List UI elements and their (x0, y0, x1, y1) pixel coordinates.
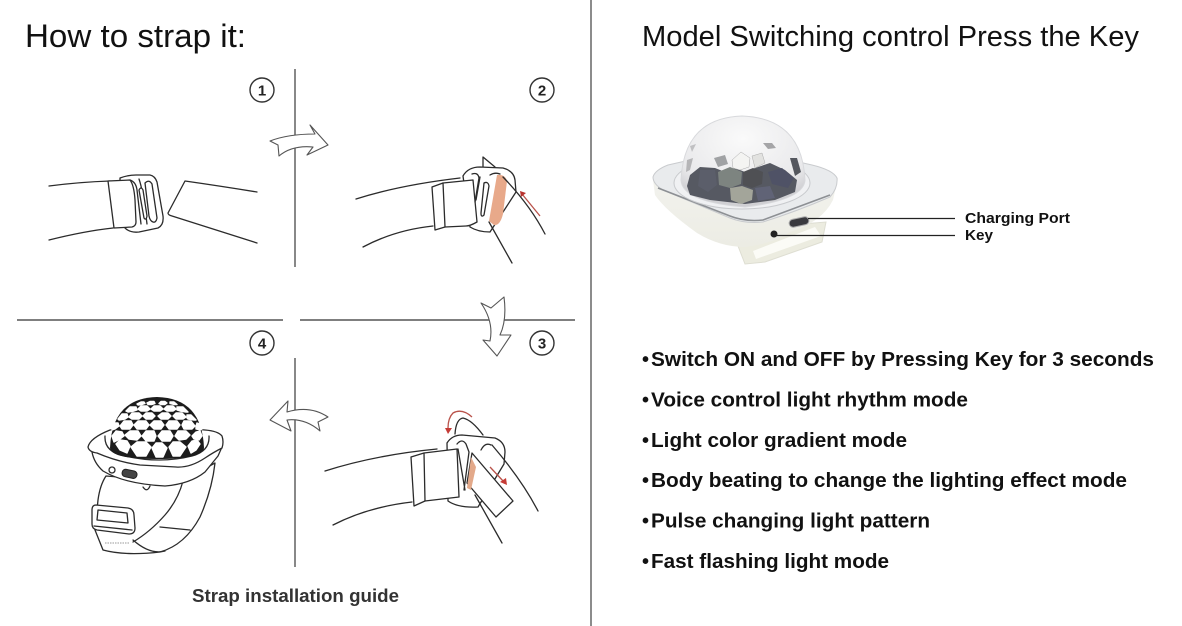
red arrows (445, 411, 507, 485)
arrow: step 3 to 4 (270, 401, 328, 431)
bullet 6: Fast flashing light mode (651, 551, 889, 573)
callout: key: Key (965, 228, 993, 244)
heading: model switching: Model Switching control Press the Key (642, 21, 1139, 53)
bullet 2: Voice control light rhythm mode (651, 390, 968, 412)
bullet 3: Light color gradient mode (651, 430, 907, 452)
bullet 4: Body beating to change the lighting effect mode (651, 470, 1127, 492)
red arrow (520, 191, 540, 216)
step number 2 (530, 78, 554, 102)
title: how to strap it: How to strap it: (25, 18, 246, 54)
panel: step 1 (49, 78, 274, 243)
product photo: disco light (653, 116, 838, 264)
step number 3 (530, 331, 554, 355)
finger and tab (467, 445, 538, 543)
caption: strap installation guide: Strap installation guide (192, 586, 399, 606)
step number 1 (250, 78, 274, 102)
callout: charging port: Charging Port (965, 211, 1070, 227)
bullet 1: Switch ON and OFF by Pressing Key for 3 seconds (651, 349, 1154, 371)
bullet 5: Pulse changing light pattern (651, 510, 930, 532)
step number 4 (250, 331, 274, 355)
bullet 3: • (642, 430, 649, 452)
disco dome (110, 397, 204, 459)
finger pulling strap (489, 173, 545, 263)
band buckle (92, 505, 135, 534)
panel: step 2 (356, 78, 554, 263)
arrow: step 2 to 3 (481, 297, 511, 356)
key button (770, 230, 778, 238)
clip foot (738, 222, 826, 264)
bullet 4: • (642, 470, 649, 492)
strap threaded through buckle (356, 157, 516, 247)
rim (653, 160, 837, 222)
device body (88, 425, 223, 486)
strap with buckle (49, 175, 163, 240)
bullet 1: • (642, 349, 649, 371)
step number 4: 4 (258, 336, 267, 352)
bullet 2: • (642, 390, 649, 412)
body (653, 160, 838, 247)
dome (681, 116, 805, 207)
facets (686, 143, 801, 204)
step number 3: 3 (538, 336, 546, 352)
strap and buckle (325, 418, 505, 525)
step number 1: 1 (258, 82, 266, 100)
panel: step 3 (325, 331, 554, 543)
step number 2: 2 (538, 82, 546, 100)
arrow: step 1 to 2 (270, 125, 328, 156)
panel: step 4 (88, 331, 274, 554)
feature list (642, 349, 1154, 573)
loose strap end (168, 181, 257, 243)
usb port (788, 216, 810, 228)
bullet 5: • (642, 510, 649, 532)
bullet 6: • (642, 551, 649, 573)
wrist band (95, 463, 215, 554)
